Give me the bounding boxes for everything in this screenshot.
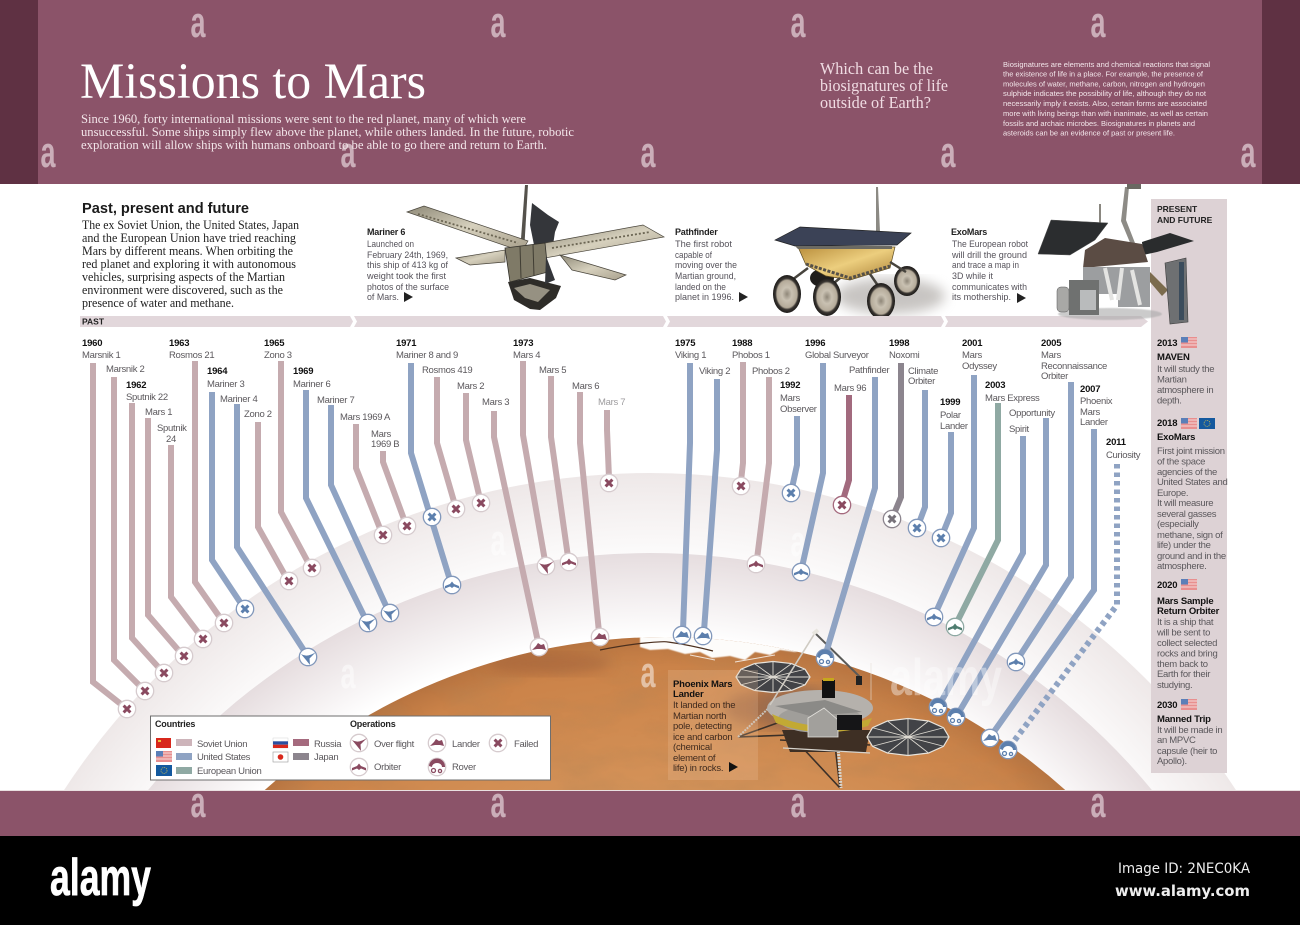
mission: Mars Observer: Mars xyxy=(780,393,800,404)
ExoMars entry: life) under the xyxy=(1157,540,1211,551)
text: Pathfinder: landed on the xyxy=(675,282,726,293)
mission: Mariner 3 xyxy=(207,366,254,618)
watermarks on the atmosphere xyxy=(188,258,806,698)
mission: Mariner 7: Mariner 7 xyxy=(317,395,354,406)
Mars Sample Return Orbiter entry: 2020 xyxy=(1157,580,1177,591)
Mars Sample Return Orbiter entry: Mars Sample xyxy=(1157,596,1213,607)
text: ExoMars: communicates with xyxy=(952,282,1027,293)
ExoMars entry: atmosphere. xyxy=(1157,561,1207,572)
mission: Mariner 6 xyxy=(293,366,377,632)
text: Pathfinder: The first robot xyxy=(675,239,732,250)
watermarks on header: a xyxy=(340,128,356,177)
watermarks on header xyxy=(40,0,1256,177)
MAVEN entry: It will study the xyxy=(1157,364,1214,375)
mission: Marsnik 1: Marsnik 1 xyxy=(82,350,120,361)
mission: Pathfinder: Pathfinder xyxy=(849,365,889,376)
mission: Mariner 7 xyxy=(317,395,399,622)
mission: Noxomi xyxy=(883,338,920,528)
legend: operations: Rover xyxy=(452,762,476,773)
legend: countries: Soviet Union xyxy=(197,739,247,750)
mission: Mars 6 xyxy=(572,381,609,646)
mission: Marsnik 2 xyxy=(106,364,154,700)
Manned Trip entry: Apollo). xyxy=(1157,756,1187,767)
text: Pathfinder: Martian ground, xyxy=(675,271,736,282)
mission: Mariner 3: 1964 xyxy=(207,366,228,377)
text: Phoenix Mars Lander: life) in rocks. xyxy=(673,763,723,774)
ExoMars entry: It will measure xyxy=(1157,498,1213,509)
Mars Sample Return Orbiter entry: It is a ship that xyxy=(1157,617,1214,628)
text: ExoMars: ExoMars xyxy=(951,227,987,237)
mission: Zono 2 xyxy=(244,409,298,590)
mission: Viking 2: Viking 2 xyxy=(699,366,730,377)
background panel: white xyxy=(0,183,1300,791)
watermarks on the atmosphere: a xyxy=(340,393,356,442)
mission: Viking 1: 1975 xyxy=(675,338,696,349)
ExoMars entry: of the space xyxy=(1157,456,1205,468)
ExoMars entry: several gasses xyxy=(1157,509,1217,520)
footer logo: alamy xyxy=(50,849,151,907)
ExoMars entry: ground and in the xyxy=(1157,551,1226,562)
Mars Sample Return Orbiter entry: studying. xyxy=(1157,680,1192,691)
mission: Mariner 8 and 9: Mariner 8 and 9 xyxy=(396,350,458,361)
mission: Mars Reconnaissance Orbiter: Orbiter xyxy=(1041,371,1068,382)
watermarks on the atmosphere: a xyxy=(490,516,506,565)
planet Mars xyxy=(260,630,1070,791)
text: biosignatures explanation: the existence of life in a place. For example, the presence of xyxy=(1003,70,1204,78)
mission: Mariner 4: Mariner 4 xyxy=(220,394,257,405)
text: Phoenix Mars Lander: element of xyxy=(673,753,716,764)
legend: countries: European Union xyxy=(197,766,261,777)
legend: operations: Over flight xyxy=(374,739,415,750)
legend: countries: Countries xyxy=(155,719,195,729)
footer url: www.alamy.com xyxy=(1115,882,1250,900)
mission: Viking 1 xyxy=(673,338,706,644)
Manned Trip entry: It will be made in xyxy=(1157,725,1222,736)
text: biosignatures explanation: molecules of water, methane, carbon, nitrogen and hydrogen xyxy=(1003,80,1205,88)
mission: Mars Reconnaissance Orbiter: Mars xyxy=(1041,350,1061,361)
ExoMars entry: (especially xyxy=(1157,519,1199,530)
mission: Mars 7 xyxy=(598,397,625,492)
mission: Global Surveyor: 1996 xyxy=(805,338,825,349)
mission: Pathfinder xyxy=(816,365,889,667)
Mars Sample Return Orbiter entry: them back to xyxy=(1157,659,1208,670)
watermarks on header: a xyxy=(1240,128,1256,177)
mission: Marsnik 1 xyxy=(82,338,136,718)
ExoMars entry: United States and xyxy=(1157,477,1227,488)
mission: Polar Lander: Lander xyxy=(940,421,968,432)
bottom band: a xyxy=(1090,778,1106,827)
text: Mariner 6: this ship of 413 kg of xyxy=(367,260,448,271)
Manned Trip entry: 2030 xyxy=(1157,700,1177,711)
text: past present future body: Mars by different means. When orbiting the xyxy=(82,244,293,258)
intro text: Since 1960, forty international missions were sent to the red planet, many of which were xyxy=(81,112,526,126)
mission: Mars 7: Mars 7 xyxy=(598,397,625,408)
watermarks on header: a xyxy=(640,128,656,177)
MAVEN entry xyxy=(1157,337,1214,406)
mission: Mars 1: Mars 1 xyxy=(145,407,172,418)
text: Phoenix Mars Lander: pole, detecting xyxy=(673,721,732,732)
mission: Viking 1: Viking 1 xyxy=(675,350,706,361)
ExoMars entry: ExoMars xyxy=(1157,432,1195,443)
footer: stock credit bar xyxy=(0,836,1300,925)
mission: Phobos 1 xyxy=(732,338,770,495)
mission: Mariner 8 and 9: 1971 xyxy=(396,338,417,349)
mission: Sputnik 22: Sputnik 22 xyxy=(126,392,168,403)
heading: biosignatures question: outside of Earth? xyxy=(820,93,931,112)
Manned Trip entry: an MPVC xyxy=(1157,735,1196,746)
text: ExoMars: its mothership. xyxy=(952,292,1011,303)
mission: Mars Observer: Observer xyxy=(780,404,817,415)
heading: past, present and future: Past, present and future xyxy=(82,201,249,217)
illustration: Phoenix Mars Lander xyxy=(736,630,949,788)
mission: Mariner 6: Mariner 6 xyxy=(293,379,330,390)
mission: Phoenix Mars Lander: Lander xyxy=(1080,417,1108,428)
text: past present future body: The ex Soviet Union, the United States, Japan xyxy=(82,218,299,232)
Mars Sample Return Orbiter entry: will be sent to xyxy=(1156,628,1210,638)
mission: Mars Odyssey: Odyssey xyxy=(962,361,997,372)
legend: operations: Orbiter xyxy=(374,762,401,773)
watermark: alamy over the atmosphere: alamy xyxy=(890,649,1002,707)
intro text: exploration will allow ships with humans onboard to be able to go there and return to Earth. xyxy=(81,138,547,152)
Manned Trip entry: capsule (heir to xyxy=(1157,746,1217,757)
watermarks on the atmosphere: a xyxy=(340,649,356,698)
mission: Climate Orbiter: Orbiter xyxy=(908,376,935,387)
intro text xyxy=(81,112,575,152)
text: past present future body: presence of water and methane. xyxy=(82,296,234,310)
mission: Viking 2 xyxy=(694,366,730,645)
mission: Phoenix Mars Lander: 2007 xyxy=(1080,384,1100,395)
watermarks on header: a xyxy=(940,128,956,177)
mission: Phoenix Mars Lander: Phoenix xyxy=(1080,396,1113,407)
watermarks on the atmosphere: a xyxy=(188,519,203,568)
mission: Mars 1969 B xyxy=(371,429,416,535)
timeline bar: past xyxy=(80,316,1148,327)
legend: operations: Operations xyxy=(350,719,396,729)
footer image id: Image ID: 2NEC0KA xyxy=(1118,861,1250,877)
mission: Mariner 4 xyxy=(220,394,317,666)
mission: Mars Reconnaissance Orbiter xyxy=(1007,338,1107,671)
Mars Sample Return Orbiter entry: collect selected xyxy=(1157,638,1217,649)
text: Pathfinder xyxy=(675,227,748,303)
spacecraft image: Mariner 6 xyxy=(407,185,664,310)
mission: Mars Express xyxy=(946,380,1040,636)
timeline bar: past: PAST xyxy=(82,316,105,326)
mission: Rosmos 21 xyxy=(169,338,233,632)
Mars Sample Return Orbiter entry: Earth for their xyxy=(1157,669,1210,680)
mission: Phobos 2: Phobos 2 xyxy=(752,366,790,377)
mission: Mars 4 xyxy=(513,338,555,575)
mission: Mars Express: 2003 xyxy=(985,380,1005,391)
text: past present future body: environment were discovered, such as the xyxy=(82,283,283,297)
mission: Mars Express: Mars Express xyxy=(985,393,1040,404)
mission: Climate Orbiter xyxy=(908,366,938,537)
text: biosignatures explanation xyxy=(1003,60,1210,138)
MAVEN entry: depth. xyxy=(1157,396,1182,406)
atmosphere inner arc xyxy=(147,553,1153,791)
mission: Mars 3: Mars 3 xyxy=(482,397,509,408)
mission: Mars 4: 1973 xyxy=(513,338,533,349)
text: biosignatures explanation: fossils and archaic microbes. Biosignatures in planets and xyxy=(1003,119,1195,128)
panel: present and future: PRESENT xyxy=(1157,204,1198,214)
mission: Phoenix Mars Lander xyxy=(981,384,1113,747)
text: Phoenix Mars Lander: (chemical xyxy=(673,742,712,753)
mission: Rosmos 419 xyxy=(422,365,472,518)
ExoMars entry: Europe. xyxy=(1157,488,1188,499)
mission: Global Surveyor: Global Surveyor xyxy=(805,350,869,361)
watermarks on header: a xyxy=(40,128,56,177)
mission: Mars 5: Mars 5 xyxy=(539,365,566,376)
legend: countries: United States xyxy=(197,752,251,763)
MAVEN entry: 2013 xyxy=(1157,338,1177,349)
MAVEN entry: atmosphere in xyxy=(1157,385,1213,396)
watermarks on the atmosphere: a xyxy=(190,258,206,307)
atmosphere outer arc xyxy=(63,473,1237,791)
ExoMars entry: methane, sign of xyxy=(1157,530,1223,541)
mission: Mars Reconnaissance Orbiter: Reconnaissance xyxy=(1041,361,1107,372)
mission: Polar Lander xyxy=(932,397,968,547)
intro text: unsuccessful. Some ships simply flew above the planet, while others landed. In the future, robotic xyxy=(81,125,575,139)
MAVEN entry: Martian xyxy=(1157,374,1187,386)
mission: Phobos 2 xyxy=(747,366,790,573)
mission: Mars 1 xyxy=(145,407,193,665)
mission: Sputnik 24: 24 xyxy=(166,434,176,445)
mission: Zono 3: 1965 xyxy=(264,338,285,349)
text: Mariner 6: Mariner 6 xyxy=(367,227,405,237)
text: Mariner 6: weight took the first xyxy=(366,271,446,282)
mission: Phoenix Mars Lander: Mars xyxy=(1080,407,1100,418)
mission: Mariner 8 and 9 xyxy=(396,338,461,594)
mission: Mars 4: Mars 4 xyxy=(513,350,540,361)
panel: present and future xyxy=(1151,199,1227,773)
text: past present future body xyxy=(82,218,299,310)
title: Missions to Mars xyxy=(80,54,426,110)
bottom band xyxy=(0,778,1300,836)
ExoMars entry: agencies of the xyxy=(1157,467,1217,478)
text: past present future body: and the European Union have tried reaching xyxy=(82,231,296,245)
mission: Global Surveyor xyxy=(792,338,869,581)
text: Phoenix Mars Lander: Phoenix Mars xyxy=(673,679,732,690)
legend: operations: Failed xyxy=(514,739,538,750)
text: biosignatures explanation: sulphide indicates the possibility of life, although they do not xyxy=(1003,89,1207,98)
mission: Mars 96 xyxy=(833,383,866,514)
mission: Marsnik 2: Marsnik 2 xyxy=(106,364,144,375)
mission: Noxomi: 1998 xyxy=(889,338,909,349)
mission: Mars 2 xyxy=(457,381,490,512)
text: past present future body: vehicles, surprising aspects of the Martian xyxy=(82,270,285,284)
mission: Mars 6: Mars 6 xyxy=(572,381,599,392)
mission: Spirit xyxy=(929,424,1030,716)
mission: Opportunity xyxy=(947,408,1055,726)
mission: Sputnik 22 xyxy=(126,380,173,682)
chart: mission timeline xyxy=(82,338,1141,759)
mission: Mars 96: Mars 96 xyxy=(834,383,866,394)
Mars Sample Return Orbiter entry: rocks and bring xyxy=(1157,648,1217,660)
ExoMars entry xyxy=(1157,418,1227,572)
MAVEN entry: MAVEN xyxy=(1157,352,1190,363)
mission: Phobos 1: 1988 xyxy=(732,338,752,349)
mission: Mars 3 xyxy=(482,397,548,656)
text: biosignatures explanation: asteroids can be an evidence of past or present life. xyxy=(1003,128,1175,138)
mission: Rosmos 419: Rosmos 419 xyxy=(422,365,472,376)
mission: Mars Odyssey: Mars xyxy=(962,350,982,361)
legend xyxy=(150,716,550,780)
text: Phoenix Mars Lander: Lander xyxy=(673,689,704,700)
mission: Noxomi: Noxomi xyxy=(889,350,920,361)
text: ExoMars: The European robot xyxy=(952,239,1028,250)
legend: operations xyxy=(350,719,538,776)
text: ExoMars: will drill the ground xyxy=(951,250,1027,261)
text: ExoMars: and trace a map in xyxy=(952,260,1019,271)
spacecraft image: ExoMars rover xyxy=(1038,184,1194,324)
text: Pathfinder: Pathfinder xyxy=(675,227,718,237)
text: ExoMars xyxy=(951,227,1028,303)
header band xyxy=(0,0,1300,184)
text: Mariner 6 xyxy=(366,227,449,303)
Mars Sample Return Orbiter entry xyxy=(1156,579,1220,691)
mission: Zono 3 xyxy=(264,338,321,577)
ExoMars entry: First joint mission xyxy=(1157,446,1225,457)
watermarks on the atmosphere: a xyxy=(640,648,656,697)
text: past present future body: red planet and exploring it with autonomous xyxy=(82,257,296,271)
mission: Mars Odyssey xyxy=(925,338,997,626)
mission: Mars 2: Mars 2 xyxy=(457,381,484,392)
mission: Mars Observer: 1992 xyxy=(780,380,800,391)
heading: biosignatures question xyxy=(820,59,948,112)
text: Pathfinder: capable of xyxy=(675,250,712,261)
mission: Curiosity: Curiosity xyxy=(1106,450,1141,461)
mission: Mars Reconnaissance Orbiter: 2005 xyxy=(1041,338,1062,349)
bottom band: a xyxy=(490,778,506,827)
mission: Sputnik 22: 1962 xyxy=(126,380,146,391)
text: Pathfinder: planet in 1996. xyxy=(675,292,734,303)
mission: Mars Odyssey: 2001 xyxy=(962,338,983,349)
mission: Mars 1969 A xyxy=(340,412,392,544)
mission: Curiosity xyxy=(999,437,1141,759)
heading: biosignatures question: Which can be the xyxy=(820,59,933,78)
Mars Sample Return Orbiter entry: Return Orbiter xyxy=(1157,606,1220,617)
text: Phoenix Mars Lander xyxy=(668,670,758,780)
ExoMars entry: 2018 xyxy=(1157,418,1177,429)
mission: Mariner 6: 1969 xyxy=(293,366,313,377)
mission: Mars 1969 B: Mars xyxy=(371,429,391,440)
legend: countries: Russia xyxy=(314,739,342,750)
legend: countries: Japan xyxy=(314,752,338,763)
text: Mariner 6: of Mars. xyxy=(367,292,399,303)
mission: Mars 1969 B: 1969 B xyxy=(371,439,399,450)
watermarks on the atmosphere: a xyxy=(790,517,806,566)
mission: Mars 5 xyxy=(539,365,578,571)
mission: Polar Lander: 1999 xyxy=(940,397,960,408)
mission: Curiosity: 2011 xyxy=(1106,437,1127,448)
mission: Polar Lander: Polar xyxy=(940,410,961,421)
bottom band: a xyxy=(190,778,206,827)
text: Mariner 6: Launched on xyxy=(367,239,414,250)
spacecraft image: Pathfinder rover xyxy=(773,187,945,319)
mission: Rosmos 21: Rosmos 21 xyxy=(169,350,214,361)
panel: present and future: AND FUTURE xyxy=(1157,215,1213,225)
text: biosignatures explanation: necessarily imply it exists. Also, certain forms are associated xyxy=(1003,99,1207,108)
mission: Sputnik 24: Sputnik xyxy=(157,423,187,434)
mission: Mariner 3: Mariner 3 xyxy=(207,379,244,390)
mission: Zono 3: Zono 3 xyxy=(264,350,292,361)
mission: Mars 1969 A: Mars 1969 A xyxy=(340,412,391,423)
Manned Trip entry xyxy=(1157,699,1222,767)
mission: Rosmos 21: 1963 xyxy=(169,338,189,349)
text: Phoenix Mars Lander: It landed on the xyxy=(673,700,735,711)
legend: countries xyxy=(155,719,342,777)
text: biosignatures explanation: Biosignatures are elements and chemical reactions that signal xyxy=(1003,60,1210,69)
Manned Trip entry: Manned Trip xyxy=(1157,714,1211,725)
mission: Mars Observer xyxy=(780,380,817,502)
legend: operations: Lander xyxy=(452,739,480,750)
text: Pathfinder: moving over the xyxy=(675,260,737,271)
text: Phoenix Mars Lander: ice and carbon xyxy=(673,732,733,743)
text: Phoenix Mars Lander: Martian north xyxy=(673,711,726,722)
mission: Climate Orbiter: Climate xyxy=(908,366,938,377)
mission: Zono 2: Zono 2 xyxy=(244,409,272,420)
text: ExoMars: 3D while it xyxy=(952,271,993,282)
mission: Sputnik 24 xyxy=(157,423,212,648)
text: Mariner 6: photos of the surface xyxy=(367,282,449,293)
mission: Opportunity: Opportunity xyxy=(1009,408,1055,419)
mission: Spirit: Spirit xyxy=(1009,424,1030,435)
mission: Marsnik 1: 1960 xyxy=(82,338,102,349)
text: biosignatures explanation: more with living beings than with inanimate, as well as certain xyxy=(1003,109,1208,118)
text: Mariner 6: February 24th, 1969, xyxy=(367,250,448,261)
heading: biosignatures question: biosignatures of life xyxy=(820,76,948,95)
mission: Phobos 1: Phobos 1 xyxy=(732,350,770,361)
bottom band: a xyxy=(790,778,806,827)
